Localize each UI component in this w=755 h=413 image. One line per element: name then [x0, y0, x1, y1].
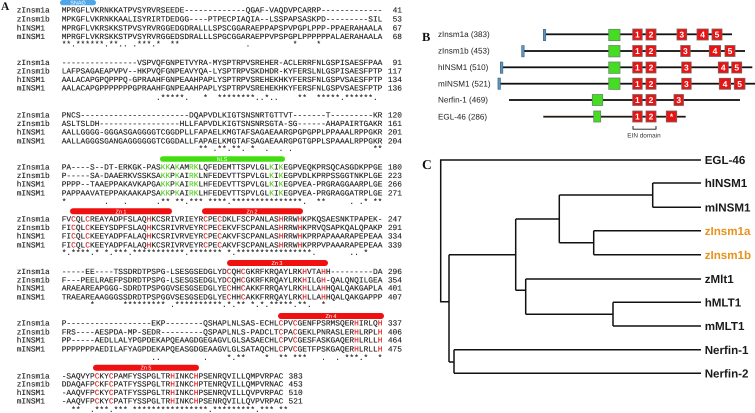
row: zInsm1b: 4	[713, 46, 718, 56]
alignment block 5: hINSM1	[17, 233, 45, 242]
alignment block 2: LAFPSAGAEAPVPV--HKPVQFGNPEAVYQA-LYSPTRPVSKDHDR-KYFERSLNLGSPISAESFPTP	[62, 68, 383, 77]
alignment block 1: 53	[393, 16, 402, 24]
alignment block 8	[17, 372, 303, 413]
row: EGL-46	[438, 111, 686, 122]
row: zInsm1b: zInsm1b (453)	[438, 47, 490, 56]
alignment block 1: zInsm1b	[17, 16, 50, 24]
alignment block 2: .*****. * ********..*.. ** *****.******.	[62, 94, 378, 103]
alignment block 5: *.****.* *.***.***********.******* *.****************. .. *	[62, 249, 368, 258]
alignment block 7: PP-----AEDLLALYPGPDEKAPQEAAGDGEGAGVLGLSASAECHLCPVCGESFASKGAQERHLRLLH	[62, 337, 383, 346]
alignment block 1: MPRGFLVKRSKKSTPVSYRVRGGEDGDRALLLSPSCGGARAEPPAPSPVPGPLPPP-PPAERAHAALA	[62, 24, 383, 33]
alignment block 6: zInsm1a	[17, 268, 50, 277]
tree labels: mINSM1	[705, 202, 751, 214]
alignment block 3: zInsm1b	[17, 120, 50, 129]
alignment block 1: MPRGFLVKRNKKATPVSYRVRSEEDE-------------QGAF-VAQDVPCARRP-------------	[62, 7, 382, 16]
alignment block 2: 134	[388, 76, 402, 85]
row: zInsm1a	[438, 29, 732, 41]
domain bar: SNAG: SNAG	[70, 1, 86, 7]
alignment block 4: 180	[388, 163, 402, 172]
domain bar: NLS	[160, 156, 285, 163]
tree labels: EGL-46	[705, 154, 746, 167]
alignment block 1: zInsm1a	[17, 7, 50, 16]
alignment block 2: hINSM1	[17, 76, 45, 85]
alignment block 3: zInsm1a	[17, 112, 50, 121]
alignment block 1: MPRGFLVKRSKKSTPVSYRVRGGEDSDRALLLSPGCGGARAEPPVPSPGPLPPPPPPALAERAHAALA	[62, 33, 383, 42]
row: hINSM1: 1	[635, 63, 640, 73]
alignment block 3: 161	[388, 120, 402, 129]
alignment block 2: mINSM1	[17, 85, 45, 94]
alignment block 7: zInsm1a	[17, 320, 50, 329]
tree labels: zInsm1b	[705, 249, 751, 262]
row: zInsm1a: 1	[635, 30, 640, 40]
domain bar: Zn 1	[70, 208, 172, 215]
row: Nerfin-1	[438, 94, 740, 106]
alignment block 1: MPKGFLVKRNKKAALISYRIRTDEDGG----PTPECPIAQIA--LSSPAPSASKPD---------SIL	[62, 16, 383, 24]
alignment block 2: zInsm1b	[17, 68, 50, 77]
alignment block 6: mINSM1	[17, 294, 45, 303]
alignment block 8: hINSM1	[17, 389, 45, 398]
domain bar: NLS: NLS	[217, 157, 228, 163]
row: hINSM1: 4	[721, 63, 726, 73]
alignment block 8: -AAQVFPCKYCPATFYSSPGLTRHINKCHPSENRQVILLQVPVRPAC	[62, 398, 284, 407]
row: zInsm1b: 5	[728, 46, 733, 56]
alignment block 5: 334	[388, 233, 402, 242]
alignment block 8: 510	[289, 389, 303, 398]
alignment block 3	[17, 112, 402, 154]
tree labels: Nerfin-1	[705, 344, 749, 357]
alignment block 3: mINSM1	[17, 138, 45, 146]
alignment block 4: zInsm1a	[17, 163, 50, 172]
alignment block 3: PNCS-----------------------DQAPVDLKIGTSNSNRTGTTVT-------T---------KR	[62, 112, 383, 121]
alignment block 6: 407	[388, 294, 402, 303]
alignment block 5: zInsm1b	[17, 224, 50, 233]
alignment block 7: mINSM1	[17, 346, 45, 355]
alignment block 4: PA----S--DT-ERKGK-PASKKAKAMRKLQFEDEMTTSPVLGLKIKEGPVEQKPRSQCASGDKPPGE	[62, 163, 383, 172]
alignment block 3: 204	[388, 138, 402, 146]
alignment block 2: 91	[393, 59, 402, 68]
alignment block 6: ARAEAREAPGGG-SDRDTPSPGGVSESGSEDGLYECHHCAKKFRRQAYLRKHLLAHHQALQAKGAPLA	[62, 285, 383, 294]
alignment block 6: F---PEELRAEFPSDRDTPSPG-LSESGSEDGLYDCQHCGKRFKRQAYLRKHILGH-QALQNQILGEA	[62, 277, 383, 286]
alignment block 5: 291	[388, 224, 402, 233]
alignment block 2: 136	[388, 85, 402, 94]
alignment block 6: hINSM1	[17, 285, 45, 294]
alignment block 5: FICQLCKEEYSDPFSLAQHKCSRIVRVEYRCPECEKVFSCPANLASHRRWHKPRVQSAPKQALQPAKP	[62, 224, 383, 233]
panel: C phylogenetic tree	[422, 154, 751, 380]
alignment block 1: 67	[393, 24, 402, 33]
alignment block 8: mINSM1	[17, 398, 45, 407]
alignment block 6: 354	[388, 277, 402, 286]
domain bar: Zn 2: Zn 2	[246, 209, 258, 215]
alignment block 3: 120	[388, 112, 402, 121]
alignment block 7: 464	[388, 337, 402, 346]
row: zInsm1b: 3	[683, 46, 688, 56]
row: EGL-46: *	[670, 112, 674, 122]
row: hINSM1: hINSM1 (510)	[438, 63, 489, 72]
EIN domain bracket: EIN domain	[627, 133, 661, 140]
alignment block 5: 339	[388, 242, 402, 250]
tree labels: hMLT1	[705, 296, 742, 310]
alignment block 1: 41	[393, 7, 402, 16]
alignment block 4	[17, 163, 402, 207]
panel: A sequence alignment	[1, 0, 402, 413]
alignment block 4: 266	[388, 181, 402, 190]
alignment block 5: mINSM1	[17, 242, 45, 250]
alignment block 2: zInsm1a	[17, 59, 50, 68]
alignment block 6	[17, 268, 402, 310]
panel letter B: B	[422, 30, 430, 44]
domain bar: SNAG	[60, 0, 96, 7]
alignment block 5: FICQLCKEEYADPFALAQHKCSRIVRVEYRCPECAKVFSCPANLASHRRWHKPRPAPAAARAPEPEAA	[62, 233, 383, 242]
alignment block 3: 201	[388, 129, 402, 138]
row: mINSM1: 1	[635, 79, 640, 89]
panel letter C: C	[422, 157, 432, 172]
row: mINSM1: 4	[723, 79, 728, 89]
row: mINSM1: 5	[737, 79, 742, 89]
row: zInsm1b	[438, 46, 745, 57]
tree labels: zMlt1	[705, 273, 734, 286]
alignment block 7: .. . *.** * ** *** . . ***.* *	[62, 354, 382, 363]
domain bar: Zn 5	[93, 365, 199, 372]
row: EGL-46: 1	[635, 112, 640, 122]
row: zInsm1a: 4	[700, 30, 705, 40]
alignment block 4: PPPP--TAAEPPAKAVKAPGAKKPKAIRKLHFEDEVTTSPVLGLKIKEGPVEA-PRGRAGGAARPLGE	[62, 181, 383, 190]
alignment block 1: mINSM1	[17, 33, 45, 42]
alignment block 8: zInsm1b	[17, 381, 50, 390]
EIN domain bracket	[627, 126, 661, 140]
row: hINSM1: 3	[684, 63, 689, 73]
row: hINSM1	[438, 62, 752, 73]
row: Nerfin-1: Nerfin-1 (469)	[438, 96, 488, 105]
alignment block 2: AALACAPGPQPPPQ-GPRAAHFGNPEAAHPAPLYSPTRPVSREHEKHKYFERSFNLGSPVSAESFPTP	[62, 76, 383, 85]
tree labels: zInsm1a	[705, 225, 751, 238]
alignment block 7: zInsm1b	[17, 329, 50, 338]
alignment block 8: 383	[289, 372, 303, 381]
alignment block 5: FVCQLCREAYADPFSLAQHKCSRIVRIEYRCPECDKLFSCPANLASHRRWHKPKQSAESNKTPAPEK-	[62, 216, 382, 225]
row: EGL-46: 2	[649, 112, 654, 122]
row: zInsm1b: 2	[649, 46, 654, 56]
alignment block 5: zInsm1a	[17, 216, 50, 225]
alignment block 2: ----------------VSPVQFGNPETVYRA-MYSPTRPVSREHER-ACLERRFNLGSPISAESFPAA	[62, 59, 383, 68]
alignment block 6: -----EE----TSSDRDTPSPG-LSESGSEDGLYDCQHCGKRFKRQAYLRKHVTAHH---------DA	[62, 268, 383, 277]
row: zInsm1b: 1	[635, 46, 640, 56]
alignment block 6: TRAEAREAAGGGSSDRDTPSPGGVSESGSEDGLYECHHCAKKFRRQAYLRKHLLAHHQALQAKGAPPP	[62, 294, 383, 303]
domain bar: Zn 2	[202, 208, 303, 215]
alignment block 8: 521	[289, 398, 303, 407]
alignment block 2: AALACAPGPPPPPPPGPRAAHFGNPEAAHPAPLYSPTRPVSREHEKHKYFERSFNLGSPVSAESFPTP	[62, 85, 383, 94]
row: zInsm1a: zInsm1a (383)	[438, 30, 490, 39]
alignment block 5: 247	[388, 216, 402, 225]
row: hINSM1: 2	[649, 63, 654, 73]
alignment block 6: 401	[388, 285, 402, 294]
domain bar: Zn 1: Zn 1	[115, 209, 127, 215]
alignment block 6: 296	[388, 268, 402, 277]
alignment block 4: zInsm1b	[17, 172, 50, 181]
row: Nerfin-1: 3	[676, 95, 681, 105]
alignment block 8: DDAQAFPCKFCPATFYSSPGLTRHINKCHPTENRQVILLQMPVRNAC	[62, 381, 284, 390]
row: zInsm1a: 2	[649, 30, 654, 40]
alignment block 7: PPPPPPPAEDILAFYAGPDEKAPQEASGDGEAAGVLGLSATAQCHLCPVCGETFPSKGAQERHLRLLH	[62, 346, 383, 355]
alignment block 7: 406	[388, 329, 402, 338]
alignment block 3: hINSM1	[17, 129, 45, 138]
alignment block 5	[17, 216, 402, 258]
tree labels	[705, 154, 751, 380]
alignment block 8: -SAQVYPCKYCPAMFYSSPGLTRHINKCHPSENRQVILLQMPVRPAC	[62, 372, 284, 381]
row: EGL-46: EGL-46 (286)	[438, 112, 487, 121]
alignment block 7: 337	[388, 320, 402, 329]
alignment block 4: 223	[388, 172, 402, 181]
alignment block 4: mINSM1	[17, 190, 45, 198]
alignment block 4: hINSM1	[17, 181, 45, 190]
alignment block 3: AALLGGGG-GGGASGAGGGGTCGGDPLLFAPAELKMGTAFSAGAEAARGPGPGPPLPPAAALRPPGKR	[62, 129, 383, 138]
alignment block 8: -AAQVFPCKYCPATFYSSPGLTRHINKCHPSENRQVILLQVPVRPAC	[62, 389, 284, 398]
row: mINSM1: 2	[649, 79, 654, 89]
alignment block 8: 453	[289, 381, 303, 390]
alignment block 4: P-----SA-DAAERKVSSKSAKKPKAIRKLNFEDEVTTSPVLGLKIKEGPVDLKPRPSSGGTNKPLGE	[62, 172, 383, 181]
alignment block 7: 475	[388, 346, 402, 355]
alignment block 4: * . . .** **.*** ****.***************. ** . .* **	[62, 198, 382, 207]
alignment block 2: 117	[388, 68, 402, 77]
tree branches	[441, 160, 701, 373]
alignment block 7: hINSM1	[17, 337, 45, 346]
domain bar: Zn 3: Zn 3	[271, 261, 283, 267]
alignment block 1: 68	[393, 33, 402, 42]
alignment block 7: P------------------EKP--------QSHAPLNLSAS-ECHLCPVCGENFPSRMSQERHIRLQH	[62, 320, 383, 329]
alignment block 1: **.******.**.. .***.* ** . * *	[62, 40, 321, 50]
domain bar: Zn 5: Zn 5	[140, 366, 152, 372]
row: mINSM1: mINSM1 (521)	[438, 79, 491, 88]
alignment block 1	[17, 7, 402, 49]
alignment block 3: AALLAGGGSGANGAGGGGGGTCGGDALLFAPAELKMGTAFSAGAEAARGPGTGPPLSPAAALRPPGKR	[62, 138, 383, 146]
alignment block 3: ASLTSLDH-----------------HLLFAPVDLKIGTSNSNRSGTA-SG------AHAPAIRTGAKR	[62, 120, 383, 129]
panel letter A: A	[1, 1, 10, 13]
alignment block 7	[17, 320, 402, 363]
alignment block 1: hINSM1	[17, 24, 45, 33]
row: zInsm1a: 3	[679, 30, 684, 40]
row: mINSM1: 3	[684, 79, 689, 89]
alignment block 4: PAPPAAVATEPPAKAAKAPSAKKPKAIRKLHFEDEVTTSPVLGLKIKEGPVEA-PRGRAGGATRPLGE	[62, 190, 383, 198]
alignment block 6: * ********* .**********.*.** *.*.*****.**. *	[62, 301, 326, 310]
row: mINSM1	[438, 78, 755, 89]
domain bar: Zn 4: Zn 4	[325, 314, 337, 320]
row: Nerfin-1: 1	[635, 95, 640, 105]
alignment block 5: FICQLCKEEYADPFALAQHKCSRIVRVEYRCPECAKVFSCPANLASHRRWHKPRPVPAAARAPEPEAA	[62, 242, 383, 250]
alignment block 7: FRS----AESPDA-MP-SEDR---------QSPAPLNLS-PADCLTCPACGEKLPNRASLERHLRPLH	[62, 329, 383, 338]
row: Nerfin-1: 2	[649, 95, 654, 105]
panel: B domain architecture	[422, 29, 755, 140]
domain bar: Zn 3	[227, 260, 328, 267]
alignment block 8: zInsm1a	[17, 372, 50, 381]
row: hINSM1: 5	[734, 63, 739, 73]
tree labels: mMLT1	[705, 320, 745, 333]
tree labels: hINSM1	[705, 177, 748, 190]
domain bar: Zn 4	[278, 313, 384, 320]
alignment block 4: 271	[388, 190, 402, 198]
row: zInsm1a: 5	[715, 30, 720, 40]
tree labels: Nerfin-2	[705, 368, 749, 380]
alignment block 6: zInsm1b	[17, 277, 50, 286]
alignment block 2	[17, 59, 402, 103]
alignment block 3: ** .**.**. * . . . **	[62, 145, 382, 154]
